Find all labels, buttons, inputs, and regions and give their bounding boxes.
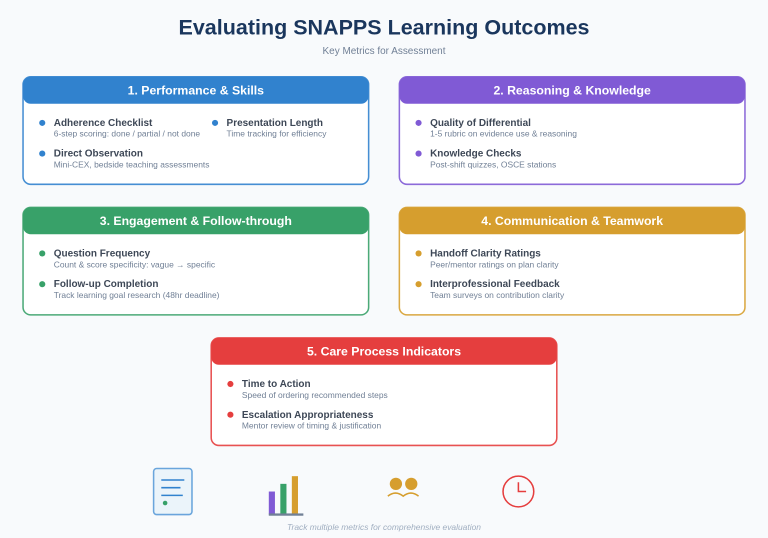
- item: Time to Action: Time to Action: [242, 379, 311, 390]
- panel 1 header: [23, 77, 369, 104]
- icon: document checklist: [154, 468, 192, 515]
- icon: bar chart: [269, 476, 303, 516]
- panel: 5. Care Process Indicators: [211, 338, 557, 445]
- item: Follow-up Completion: Track learning goal research (48hr deadline): [54, 290, 220, 300]
- item: Presentation Length: [212, 118, 327, 139]
- item: Knowledge Checks: Knowledge Checks: [430, 149, 522, 160]
- panel: 1. Performance & Skills: [23, 77, 369, 184]
- panel 5 header: 5. Care Process Indicators: [307, 345, 461, 359]
- item: Presentation Length: Time tracking for efficiency: [227, 129, 327, 139]
- item: Quality of Differential: 1-5 rubric on evidence use & reasoning: [430, 129, 577, 139]
- icon: clock: [503, 476, 534, 507]
- item: Follow-up Completion: Follow-up Completion: [54, 279, 158, 290]
- panel: 4. Communication & Teamwork: [399, 207, 745, 315]
- item: Escalation Appropriateness: [227, 410, 381, 431]
- item: Follow-up Completion: [39, 279, 220, 300]
- panel: 3. Engagement & Follow-through: [23, 207, 369, 315]
- panel 4 header: [399, 207, 745, 234]
- item: Handoff Clarity Ratings: Peer/mentor ratings on plan clarity: [430, 259, 559, 269]
- footer note: Track multiple metrics for comprehensive evaluation: [287, 522, 481, 532]
- item: Escalation Appropriateness: Mentor review of timing & justification: [242, 421, 381, 431]
- item: Time to Action: Speed of ordering recommended steps: [242, 390, 388, 400]
- item: Question Frequency: Count & score specificity: vague → specific: [54, 259, 215, 269]
- panel 2 header: 2. Reasoning & Knowledge: [493, 83, 651, 97]
- item: Quality of Differential: Quality of Differential: [430, 118, 531, 129]
- item: Knowledge Checks: Post-shift quizzes, OSCE stations: [430, 159, 556, 169]
- panel 1 header: 1. Performance & Skills: [128, 83, 264, 97]
- panel 5 header: [211, 338, 557, 365]
- item: Question Frequency: [39, 249, 215, 269]
- panel 3 header: 3. Engagement & Follow-through: [100, 214, 292, 228]
- item: Knowledge Checks: [415, 149, 556, 169]
- panel 4 header: 4. Communication & Teamwork: [481, 214, 663, 228]
- icon: people: [388, 478, 419, 496]
- subtitle: Key Metrics for Assessment: [323, 46, 446, 57]
- panel 3 header: [23, 207, 369, 234]
- item: Adherence Checklist: [39, 118, 200, 139]
- item: Direct Observation: [39, 149, 209, 169]
- item: Direct Observation: Direct Observation: [54, 149, 143, 160]
- item: Handoff Clarity Ratings: [415, 249, 559, 269]
- item: Time to Action: [227, 379, 388, 400]
- item: Interprofessional Feedback: Interprofessional Feedback: [430, 279, 560, 290]
- item: Adherence Checklist: 6-step scoring: done / partial / not done: [54, 129, 200, 139]
- title: Evaluating SNAPPS Learning Outcomes: [179, 16, 590, 40]
- panel: 2. Reasoning & Knowledge: [399, 77, 745, 184]
- item: Handoff Clarity Ratings: Handoff Clarity Ratings: [430, 249, 541, 260]
- item: Interprofessional Feedback: [415, 279, 565, 300]
- panel 2 header: [399, 77, 745, 104]
- item: Escalation Appropriateness: Escalation Appropriateness: [242, 410, 374, 421]
- item: Adherence Checklist: Adherence Checklist: [54, 118, 153, 129]
- item: Direct Observation: Mini-CEX, bedside teaching assessments: [54, 159, 209, 169]
- item: Question Frequency: Question Frequency: [54, 249, 151, 260]
- item: Interprofessional Feedback: Team surveys on contribution clarity: [430, 290, 565, 300]
- item: Presentation Length: Presentation Length: [227, 118, 323, 129]
- item: Quality of Differential: [415, 118, 577, 139]
